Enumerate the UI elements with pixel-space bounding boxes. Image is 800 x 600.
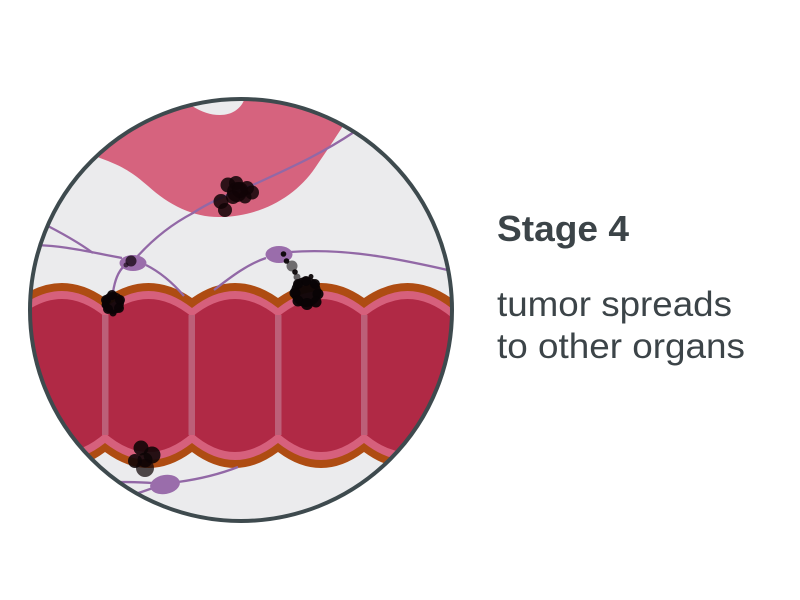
colon wall: outer orange layer <box>18 283 451 468</box>
colon: segment dividers <box>102 315 368 435</box>
description text: tumor spreads <box>497 285 732 324</box>
lymph vessels <box>30 132 452 494</box>
illustration: magnified tissue circle <box>18 90 452 521</box>
tumor: colon wall upper right with chain to node <box>281 251 324 310</box>
colon wall: pink layer <box>18 291 451 460</box>
tumor cells in lymph node <box>124 256 136 268</box>
tumor: liver metastasis <box>214 176 259 217</box>
tumor: colon wall bottom <box>128 440 160 477</box>
heading: Stage 4: Stage 4 <box>497 208 629 249</box>
lymph nodes <box>120 246 292 496</box>
colon: dark red interior <box>18 299 451 452</box>
circle outline <box>30 99 452 521</box>
description text: to other organs <box>497 327 745 366</box>
circle background <box>31 100 451 520</box>
organ: pink liver shape <box>98 101 342 217</box>
tumor: colon wall upper left <box>101 290 125 316</box>
description text <box>497 285 745 366</box>
